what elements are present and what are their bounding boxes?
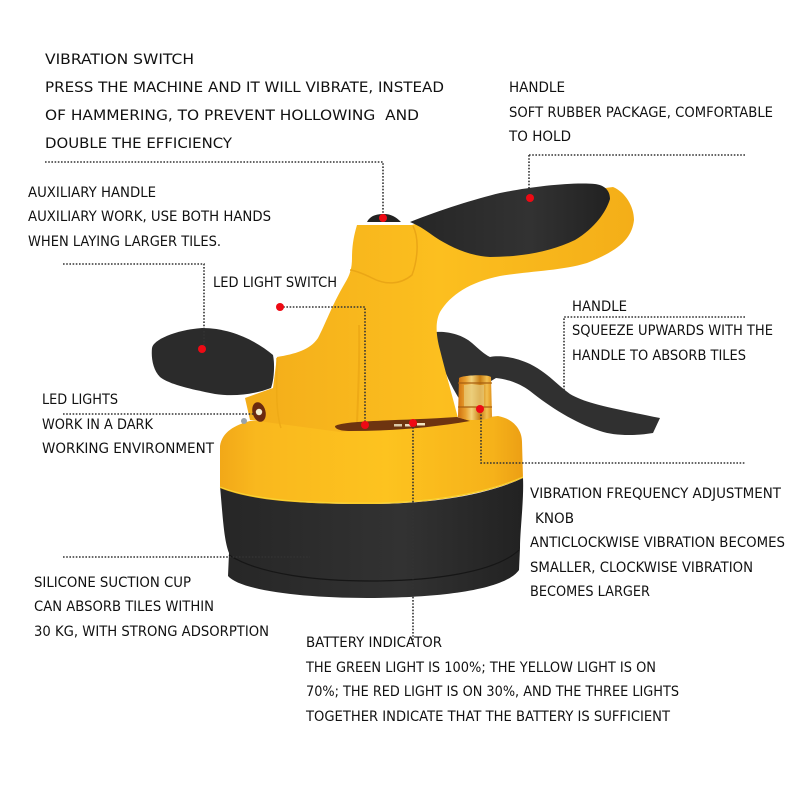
text: handle: [508, 80, 773, 145]
text: auxiliary handle: WHEN LAYING LARGER TILES.: [28, 234, 221, 250]
text: lever handle: SQUEEZE UPWARDS WITH THE: [572, 323, 773, 339]
text: vibration switch: [45, 51, 444, 152]
text: vibration switch: OF HAMMERING, TO PREVENT HOLLOWING AND: [45, 107, 419, 124]
text: lever handle: HANDLE TO ABSORB TILES: [572, 348, 746, 364]
text: battery indicator: BATTERY INDICATOR: [306, 635, 442, 651]
lever handle: [436, 332, 660, 435]
main grip: [410, 184, 610, 257]
text: vibration switch: VIBRATION SWITCH: [45, 51, 194, 68]
yellow body and main handle: [245, 187, 634, 432]
LED lamp: [241, 401, 268, 424]
leader lines: [45, 155, 745, 640]
vibration button: [367, 214, 401, 222]
text: handle: TO HOLD: [508, 129, 571, 145]
text: LED light switch: LED LIGHT SWITCH: [213, 275, 337, 291]
auxiliary grip: [152, 328, 274, 395]
text: battery indicator: TOGETHER INDICATE THAT THE BATTERY IS SUFFICIENT: [305, 709, 670, 725]
text: vibration frequency knob: SMALLER, CLOCKWISE VIBRATION: [530, 560, 753, 576]
control panel: [335, 417, 470, 431]
text: LED lights: WORK IN A DARK: [42, 417, 154, 433]
adjustment knob: [458, 375, 492, 420]
text: vibration frequency knob: VIBRATION FREQUENCY ADJUSTMENT: [530, 486, 781, 502]
text: vibration switch: PRESS THE MACHINE AND IT WILL VIBRATE, INSTEAD: [45, 79, 444, 96]
text: silicone suction cup: 30 KG, WITH STRONG ADSORPTION: [34, 624, 269, 640]
suction cup: [220, 478, 523, 598]
text: battery indicator: 70%; THE RED LIGHT IS ON 30%, AND THE THREE LIGHTS: [306, 684, 679, 700]
text: auxiliary handle: [28, 185, 271, 250]
text: vibration frequency knob: KNOB: [535, 511, 574, 527]
text: auxiliary handle: AUXILIARY HANDLE: [28, 185, 156, 201]
text: vibration switch: DOUBLE THE EFFICIENCY: [45, 135, 232, 152]
text: LED lights: [42, 392, 214, 457]
text: auxiliary handle: AUXILIARY WORK, USE BOTH HANDS: [28, 209, 271, 225]
product: tile vibration machine: [152, 184, 660, 598]
text: silicone suction cup: CAN ABSORB TILES WITHIN: [34, 599, 214, 615]
text: silicone suction cup: SILICONE SUCTION CUP: [34, 575, 191, 591]
text: LED lights: LED LIGHTS: [42, 392, 118, 408]
text: vibration frequency knob: ANTICLOCKWISE VIBRATION BECOMES: [530, 535, 785, 551]
text: LED lights: WORKING ENVIRONMENT: [42, 441, 214, 457]
text: vibration frequency knob: [530, 486, 785, 600]
red marker dots: [198, 194, 534, 429]
text: battery indicator: [305, 635, 679, 725]
yellow base: [220, 416, 523, 504]
text: silicone suction cup: [34, 575, 269, 640]
text: vibration frequency knob: BECOMES LARGER: [530, 584, 650, 600]
text: handle: SOFT RUBBER PACKAGE, COMFORTABLE: [509, 105, 773, 121]
text: lever handle: HANDLE: [572, 299, 627, 315]
text: handle: HANDLE: [509, 80, 565, 96]
text: battery indicator: THE GREEN LIGHT IS 100%; THE YELLOW LIGHT IS ON: [305, 660, 656, 676]
text: lever handle: [572, 299, 773, 364]
